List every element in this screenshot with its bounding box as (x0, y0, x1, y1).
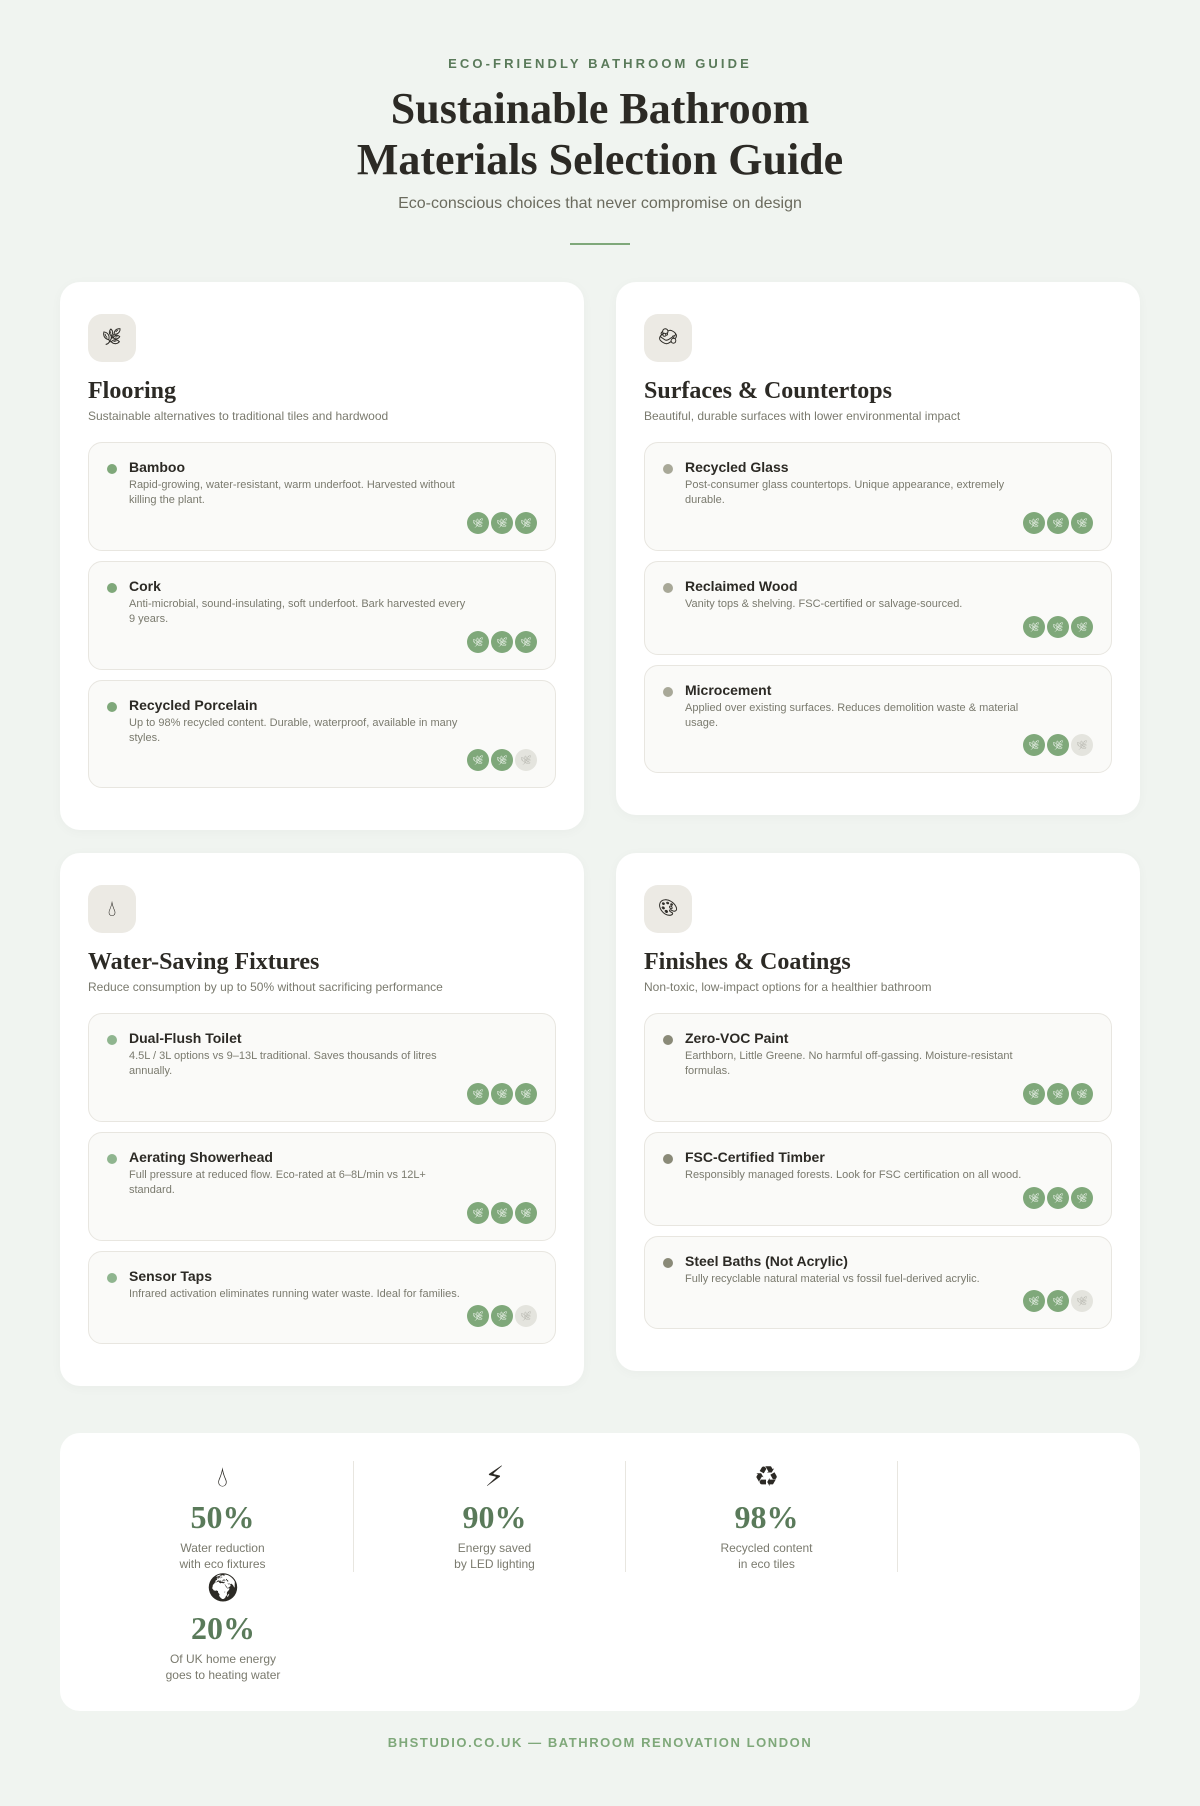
title: Sustainable Bathroom (391, 84, 809, 133)
item: aerating showerhead: Aerating Showerhead (129, 1149, 273, 1165)
item: recycled porcelain: Up to 98% recycled content. Durable, waterproof, available in many styles. (129, 717, 457, 744)
item: microcement: Applied over existing surfaces. Reduces demolition waste & material usage. (685, 702, 1018, 729)
panel: finishes (616, 853, 1140, 1371)
stat: heating water: 20% (191, 1610, 255, 1646)
item: aerating showerhead: 🌿︎ (496, 1208, 508, 1218)
item: aerating showerhead: Full pressure at reduced flow. Eco-rated at 6–8L/min vs 12L+ standard. (129, 1169, 426, 1196)
stat: recycled content: Recycled content (720, 1541, 813, 1555)
item: recycled glass: Recycled Glass (685, 459, 789, 475)
stat: energy saved: by LED lighting (454, 1557, 535, 1571)
item: recycled porcelain: Recycled Porcelain (129, 697, 257, 713)
material list: water (88, 1013, 556, 1344)
item: zero-voc paint: 🌿︎ (1076, 1089, 1088, 1099)
icon: recycled surface (644, 314, 692, 362)
item: cork: 🌿︎ (520, 637, 532, 647)
item: fsc-certified timber: FSC-Certified Timber (685, 1149, 825, 1165)
item: recycled porcelain: 🌿︎ (472, 755, 484, 765)
stat: energy saved: 90% (462, 1499, 526, 1535)
stat: water reduction: Water reduction (180, 1541, 265, 1555)
item: fsc-certified timber: Responsibly managed forests. Look for FSC certification on all wood. (685, 1169, 1021, 1181)
stat: heating water: goes to heating water (166, 1668, 280, 1682)
item: fsc-certified timber: 🌿︎ (1076, 1193, 1088, 1203)
item: dual-flush toilet: 🌿︎ (472, 1089, 484, 1099)
footer: BHSTUDIO.CO.UK — BATHROOM RENOVATION LONDON (388, 1735, 812, 1750)
icon: herb: 🌿︎ (102, 329, 122, 346)
item: fsc-certified timber (644, 1132, 1112, 1226)
item: bamboo: Bamboo (129, 459, 185, 475)
item: recycled glass: 🌿︎ (1052, 518, 1064, 528)
stat: heating water: Of UK home energy (170, 1652, 276, 1666)
item: cork (88, 561, 556, 670)
item: zero-voc paint: Earthborn, Little Greene. No harmful off-gassing. Moisture-resistant formulas. (685, 1050, 1013, 1077)
heading: surfaces: Surfaces & Countertops (644, 378, 892, 404)
item: cork: Cork (129, 578, 161, 594)
item: bamboo (88, 442, 556, 551)
stat: recycled content: 98% (734, 1499, 798, 1535)
item: recycled glass: 🌿︎ (1028, 518, 1040, 528)
item: recycled porcelain: 🌿︎ (520, 755, 532, 765)
item: recycled porcelain (88, 680, 556, 788)
item: steel baths (644, 1236, 1112, 1329)
text: finishes description: Non-toxic, low-impact options for a healthier bathroom (644, 980, 931, 994)
item: microcement (644, 665, 1112, 773)
title (357, 84, 843, 184)
item: cork: Anti-microbial, sound-insulating, soft underfoot. Bark harvested every 9 years. (129, 598, 465, 625)
item: sensor taps: Infrared activation eliminates running water waste. Ideal for families. (129, 1288, 460, 1300)
item: reclaimed wood: Reclaimed Wood (685, 578, 798, 594)
text: surfaces description: Beautiful, durable surfaces with lower environmental impact (644, 409, 960, 423)
item: steel baths: 🌿︎ (1076, 1296, 1088, 1306)
heading: finishes: Finishes & Coatings (644, 949, 851, 975)
item: sensor taps: Sensor Taps (129, 1268, 212, 1284)
item: bamboo: 🌿︎ (520, 518, 532, 528)
item: steel baths: Fully recyclable natural material vs fossil fuel-derived acrylic. (685, 1273, 980, 1285)
item: steel baths: Steel Baths (Not Acrylic) (685, 1253, 848, 1269)
item: cork: 🌿︎ (472, 637, 484, 647)
title: Materials Selection Guide (357, 135, 843, 184)
stat: water reduction: 50% (190, 1499, 254, 1535)
heading: flooring: Flooring (88, 378, 176, 404)
stat: heating water: 🌍︎ (205, 1572, 241, 1603)
item: aerating showerhead: 🌿︎ (520, 1208, 532, 1218)
item: reclaimed wood: 🌿︎ (1052, 622, 1064, 632)
item: sensor taps: 🌿︎ (520, 1311, 532, 1321)
stat: recycled content: in eco tiles (738, 1557, 795, 1571)
item: dual-flush toilet: Dual-Flush Toilet (129, 1030, 242, 1046)
item: reclaimed wood (644, 561, 1112, 655)
item: dual-flush toilet: 🌿︎ (520, 1089, 532, 1099)
item: zero-voc paint (644, 1013, 1112, 1122)
icon: palette: 🎨︎ (658, 900, 678, 917)
text: water description: Reduce consumption by up to 50% without sacrificing performance (88, 980, 443, 994)
item: bamboo: Rapid-growing, water-resistant, warm underfoot. Harvested without killing the plant. (129, 479, 455, 506)
stat: energy saved (360, 1461, 626, 1572)
item: zero-voc paint: 🌿︎ (1028, 1089, 1040, 1099)
item: reclaimed wood: 🌿︎ (1028, 622, 1040, 632)
material list: surfaces (644, 442, 1112, 773)
item: sensor taps (88, 1251, 556, 1344)
item: dual-flush toilet (88, 1013, 556, 1122)
stat: recycled content (632, 1461, 898, 1572)
panel: statistics (60, 1433, 1140, 1711)
material list: finishes (644, 1013, 1112, 1329)
icon: herb (88, 314, 136, 362)
item: reclaimed wood: Vanity tops & shelving. FSC-certified or salvage-sourced. (685, 598, 962, 610)
item: aerating showerhead: 🌿︎ (472, 1208, 484, 1218)
stat: recycled content: ♻︎ (754, 1461, 779, 1492)
item: recycled glass: Post-consumer glass countertops. Unique appearance, extremely durable. (685, 479, 1004, 506)
icon: recycled surface: 🧼︎ (658, 329, 678, 346)
item: microcement: 🌿︎ (1052, 740, 1064, 750)
panel: flooring (60, 282, 584, 830)
item: fsc-certified timber: 🌿︎ (1052, 1193, 1064, 1203)
item: microcement: 🌿︎ (1076, 740, 1088, 750)
panel: surfaces (616, 282, 1140, 815)
item: bamboo: 🌿︎ (496, 518, 508, 528)
item: microcement: 🌿︎ (1028, 740, 1040, 750)
text: flooring description: Sustainable alternatives to traditional tiles and hardwood (88, 409, 388, 423)
item: cork: 🌿︎ (496, 637, 508, 647)
item: steel baths: 🌿︎ (1028, 1296, 1040, 1306)
stat: water reduction: with eco fixtures (179, 1557, 266, 1571)
stat: energy saved: ⚡︎ (485, 1461, 504, 1492)
stat: heating water (166, 1572, 280, 1682)
panel: water-saving fixtures (60, 853, 584, 1386)
item: sensor taps: 🌿︎ (496, 1311, 508, 1321)
item: dual-flush toilet: 4.5L / 3L options vs 9–13L traditional. Saves thousands of litres annually. (129, 1050, 437, 1077)
header (357, 56, 843, 245)
stat: water reduction (88, 1461, 354, 1572)
icon: water drop (88, 885, 136, 933)
item: reclaimed wood: 🌿︎ (1076, 622, 1088, 632)
icon: water drop: 💧︎ (108, 896, 116, 921)
item: recycled glass: 🌿︎ (1076, 518, 1088, 528)
subtitle: Eco-conscious choices that never compromise on design (398, 195, 802, 212)
item: zero-voc paint: Zero-VOC Paint (685, 1030, 788, 1046)
heading: water-saving fixtures: Water-Saving Fixtures (88, 949, 319, 975)
item: zero-voc paint: 🌿︎ (1052, 1089, 1064, 1099)
item: aerating showerhead (88, 1132, 556, 1241)
stat: energy saved: Energy saved (458, 1541, 531, 1555)
item: bamboo: 🌿︎ (472, 518, 484, 528)
item: recycled porcelain: 🌿︎ (496, 755, 508, 765)
icon: palette (644, 885, 692, 933)
eyebrow: ECO-FRIENDLY BATHROOM GUIDE (448, 56, 752, 71)
item: fsc-certified timber: 🌿︎ (1028, 1193, 1040, 1203)
stat: water reduction: 💧︎ (217, 1461, 228, 1492)
item: recycled glass (644, 442, 1112, 551)
item: steel baths: 🌿︎ (1052, 1296, 1064, 1306)
item: sensor taps: 🌿︎ (472, 1311, 484, 1321)
material list: flooring (88, 442, 556, 788)
item: dual-flush toilet: 🌿︎ (496, 1089, 508, 1099)
item: microcement: Microcement (685, 682, 771, 698)
